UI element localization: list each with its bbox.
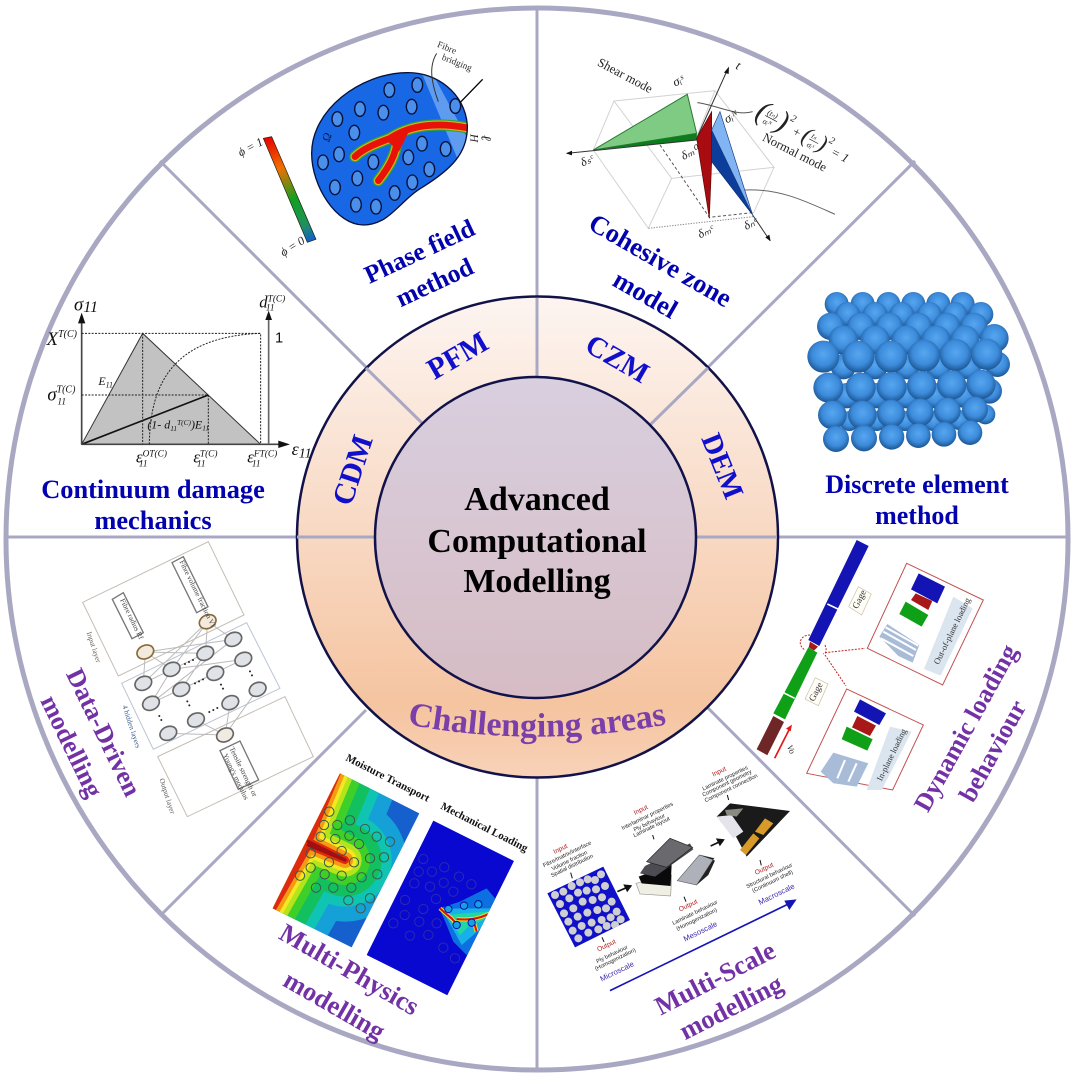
illustration: phase field domain: Ω — [319, 130, 335, 144]
illustration: traction separation law: + — [790, 124, 804, 140]
illustration: stress strain chart: 11 — [83, 299, 98, 316]
illustration: traction separation law: σᵢᴺ — [761, 117, 773, 129]
illustration: stress strain chart: 11 — [170, 424, 177, 433]
ring label: Challenging areas: Challenging areas — [410, 704, 666, 744]
heading: Continuum damage mechanics: Continuum damage — [41, 474, 265, 504]
illustration: stress strain chart: T(C) — [200, 449, 218, 460]
illustration: stress strain chart: 11 — [57, 398, 66, 408]
illustration: split Hopkinson bar — [757, 540, 983, 790]
illustration: traction separation law: = 1 — [829, 145, 851, 166]
illustration: contour plots — [260, 752, 530, 1002]
heading: Phase field method: Phase field — [360, 213, 479, 289]
ring label: PFM: PFM — [421, 325, 494, 386]
illustration: contour plots: Moisture Transport — [344, 752, 432, 805]
heading: Dynamic loading behaviour: behaviour — [953, 695, 1032, 807]
illustration: stress strain chart: FT(C) — [253, 449, 277, 460]
panel: method ring — [296, 295, 780, 779]
illustration: scale hierarchy: Microscale — [599, 959, 635, 983]
panel: dynamic loading behaviour — [757, 540, 1032, 816]
illustration: scale hierarchy: (Homogenization) — [594, 947, 637, 972]
illustration: split Hopkinson bar: Out-of-plane loading — [931, 595, 973, 666]
panel: multi-physics modelling — [260, 752, 530, 1046]
illustration: stress strain chart: 11 — [197, 460, 205, 470]
illustration: stress strain chart: σ — [74, 295, 83, 316]
illustration: scale hierarchy: Laminate behaviour — [672, 900, 719, 927]
heading: Phase field method: method — [391, 252, 478, 313]
illustration: traction separation law: δₘᶜ — [695, 221, 717, 241]
heading: Continuum damage mechanics — [41, 474, 265, 535]
heading: Multi-Scale modelling: Multi-Scale — [650, 935, 780, 1021]
illustration: sphere packing — [807, 292, 1010, 452]
illustration: stress strain chart: 11 — [139, 460, 148, 470]
illustration: stress strain chart: )E — [190, 417, 203, 431]
illustration: phase field domain: H — [468, 133, 480, 143]
illustration: traction separation law: tₛ — [810, 131, 820, 142]
panel: data-driven modelling — [35, 542, 313, 817]
panel: phase field method — [236, 40, 492, 313]
illustration: traction separation law: Shear mode — [595, 55, 655, 96]
illustration: scale hierarchy: Output — [754, 862, 775, 877]
illustration: phase field domain: ϕ = 0 — [277, 233, 307, 259]
illustration: traction separation law: δₘ⁰ — [679, 142, 703, 163]
illustration: stress strain chart: T(C) — [57, 385, 76, 396]
illustration: traction separation law: ) — [811, 130, 832, 157]
illustration: traction separation law: (tₙ) — [766, 108, 780, 121]
illustration: traction separation law: 2 — [788, 113, 798, 125]
illustration: scale hierarchy: Output — [596, 938, 617, 953]
illustration: stress strain chart: 11 — [202, 423, 209, 432]
illustration: traction separation law — [566, 55, 857, 241]
illustration: neural network: Input layer — [85, 630, 103, 664]
illustration: phase field domain: ℓ — [477, 135, 492, 141]
ring label: CZM: CZM — [580, 328, 655, 390]
illustration: split Hopkinson bar: Gage — [851, 589, 869, 611]
illustration: phase field domain: bridging — [440, 53, 474, 74]
illustration: scale hierarchy: Fibre/matrix/interface — [542, 840, 593, 869]
illustration: phase field domain: Fibre — [436, 40, 458, 57]
illustration: scale hierarchy: Ply behaviour — [596, 945, 629, 965]
illustration: stress strain chart: 11 — [106, 381, 113, 390]
illustration: stress strain chart: ε — [247, 448, 254, 467]
title: Modelling — [463, 563, 611, 600]
illustration: phase field domain — [236, 40, 492, 259]
heading: Discrete element method — [825, 470, 1009, 530]
title: Computational — [427, 523, 647, 560]
heading: Data-Driven modelling: modelling — [35, 691, 109, 802]
illustration: scale hierarchy: Laminate properties — [702, 765, 749, 792]
heading: Cohesive zone model: Cohesive zone — [584, 207, 737, 313]
illustration: scale hierarchy: Spatial distribution — [550, 853, 594, 879]
illustration: scale hierarchy: Component geometry — [702, 769, 753, 798]
illustration: stress strain chart: T(C) — [268, 293, 285, 304]
illustration: traction separation law: δₛᶜ — [578, 151, 597, 169]
illustration: phase field domain: ϕ = 1 — [236, 135, 265, 159]
heading: Data-Driven modelling: Data-Driven — [60, 664, 147, 801]
illustration: scale hierarchy — [542, 765, 797, 991]
illustration: scale hierarchy: (Homogenization) — [676, 907, 718, 932]
illustration: traction separation law: Normal mode — [760, 130, 829, 175]
panel: central circle — [375, 377, 696, 698]
illustration: scale hierarchy: Input — [633, 804, 649, 817]
illustration: neural network: Fibre radius Rf — [118, 597, 146, 641]
illustration: split Hopkinson bar: Vo — [785, 743, 798, 756]
illustration: neural network: Output layer — [157, 777, 178, 815]
illustration: neural network: Young's modulus — [221, 752, 251, 801]
illustration: stress strain chart: 11 — [299, 447, 312, 462]
panel: multi-scale modelling — [542, 765, 797, 1046]
illustration: split Hopkinson bar: Gage — [808, 681, 826, 703]
illustration: stress strain chart: T(C) — [177, 418, 191, 427]
illustration: traction separation law: ( — [797, 122, 817, 150]
illustration: traction separation law: σᵢˢ — [805, 140, 816, 151]
illustration: stress strain chart: ε — [292, 439, 299, 459]
illustration: traction separation law: δₙᶜ — [741, 214, 760, 233]
illustration: stress strain chart: (1- d — [147, 417, 170, 431]
heading: Multi-Scale modelling: modelling — [674, 968, 788, 1046]
illustration: traction separation law: σᵢᴺ — [722, 107, 741, 126]
ring label: CDM: CDM — [326, 431, 380, 509]
illustration: scale hierarchy: Volume fraction — [551, 850, 589, 872]
illustration: stress strain chart: E — [98, 374, 106, 388]
heading: Continuum damage mechanics: mechanics — [94, 505, 212, 535]
illustration: traction separation law: t — [734, 58, 743, 73]
illustration: neural network: Fibre volume fraction Vf — [178, 559, 218, 629]
heading: Discrete element method: method — [875, 501, 959, 530]
illustration: stress strain chart: σ — [47, 385, 57, 406]
illustration: stress strain chart: ε — [136, 448, 143, 467]
illustration: contour plots: Mechanical Loading — [439, 800, 530, 855]
panel: continuum damage mechanics — [41, 292, 312, 535]
title: Advanced — [464, 481, 610, 518]
illustration: scale hierarchy: Mesoscale — [682, 919, 719, 943]
illustration: scale hierarchy: Macroscale — [757, 882, 796, 907]
title — [427, 481, 647, 600]
illustration: stress strain chart: 1 — [275, 331, 283, 347]
heading: Multi-Physics modelling: Multi-Physics — [274, 917, 425, 1021]
heading: Dynamic loading behaviour: Dynamic loading — [908, 639, 1023, 816]
illustration: traction separation law: ( — [751, 94, 777, 129]
illustration: scale hierarchy: Input — [552, 843, 569, 856]
heading: Multi-Physics modelling: modelling — [279, 964, 390, 1046]
illustration: stress strain chart: ε — [193, 448, 200, 467]
illustration: scale hierarchy: Interlaminar properties — [621, 802, 675, 832]
illustration: stress strain chart: 11 — [252, 460, 261, 470]
illustration: stress strain chart — [46, 292, 312, 470]
illustration: scale hierarchy: Output — [678, 898, 699, 913]
illustration: scale hierarchy: Input — [711, 766, 728, 778]
illustration: neural network: Tensile strength or — [228, 745, 260, 799]
panel: cohesive zone model — [566, 55, 857, 324]
heading: Discrete element method: Discrete element — [825, 470, 1009, 499]
illustration: scale hierarchy: Ply behaviour — [633, 813, 666, 833]
illustration: traction separation law: 2 — [827, 135, 837, 147]
illustration: stress strain chart: 11 — [266, 304, 275, 314]
illustration: traction separation law: ) — [769, 104, 795, 138]
illustration: scale hierarchy: (Continuum shell) — [752, 870, 794, 894]
illustration: scale hierarchy: Laminate layout — [633, 816, 671, 839]
illustration: stress strain chart: d — [259, 292, 268, 311]
illustration: stress strain chart: X — [47, 329, 58, 350]
illustration: traction separation law: σᵢˢ — [670, 72, 687, 89]
illustration: stress strain chart: T(C) — [58, 329, 78, 340]
illustration: split Hopkinson bar: In-plane loading — [874, 726, 909, 783]
illustration: scale hierarchy: Component connection — [704, 773, 759, 804]
ring label: DEM: DEM — [695, 429, 750, 504]
illustration: neural network: 4 hidden layers — [120, 704, 143, 749]
heading: Cohesive zone model: model — [608, 264, 683, 324]
illustration: stress strain chart: OT(C) — [143, 449, 167, 460]
panel: discrete element method — [807, 292, 1010, 530]
illustration: neural network — [83, 542, 313, 817]
illustration: scale hierarchy: Structural behaviour — [746, 862, 794, 890]
